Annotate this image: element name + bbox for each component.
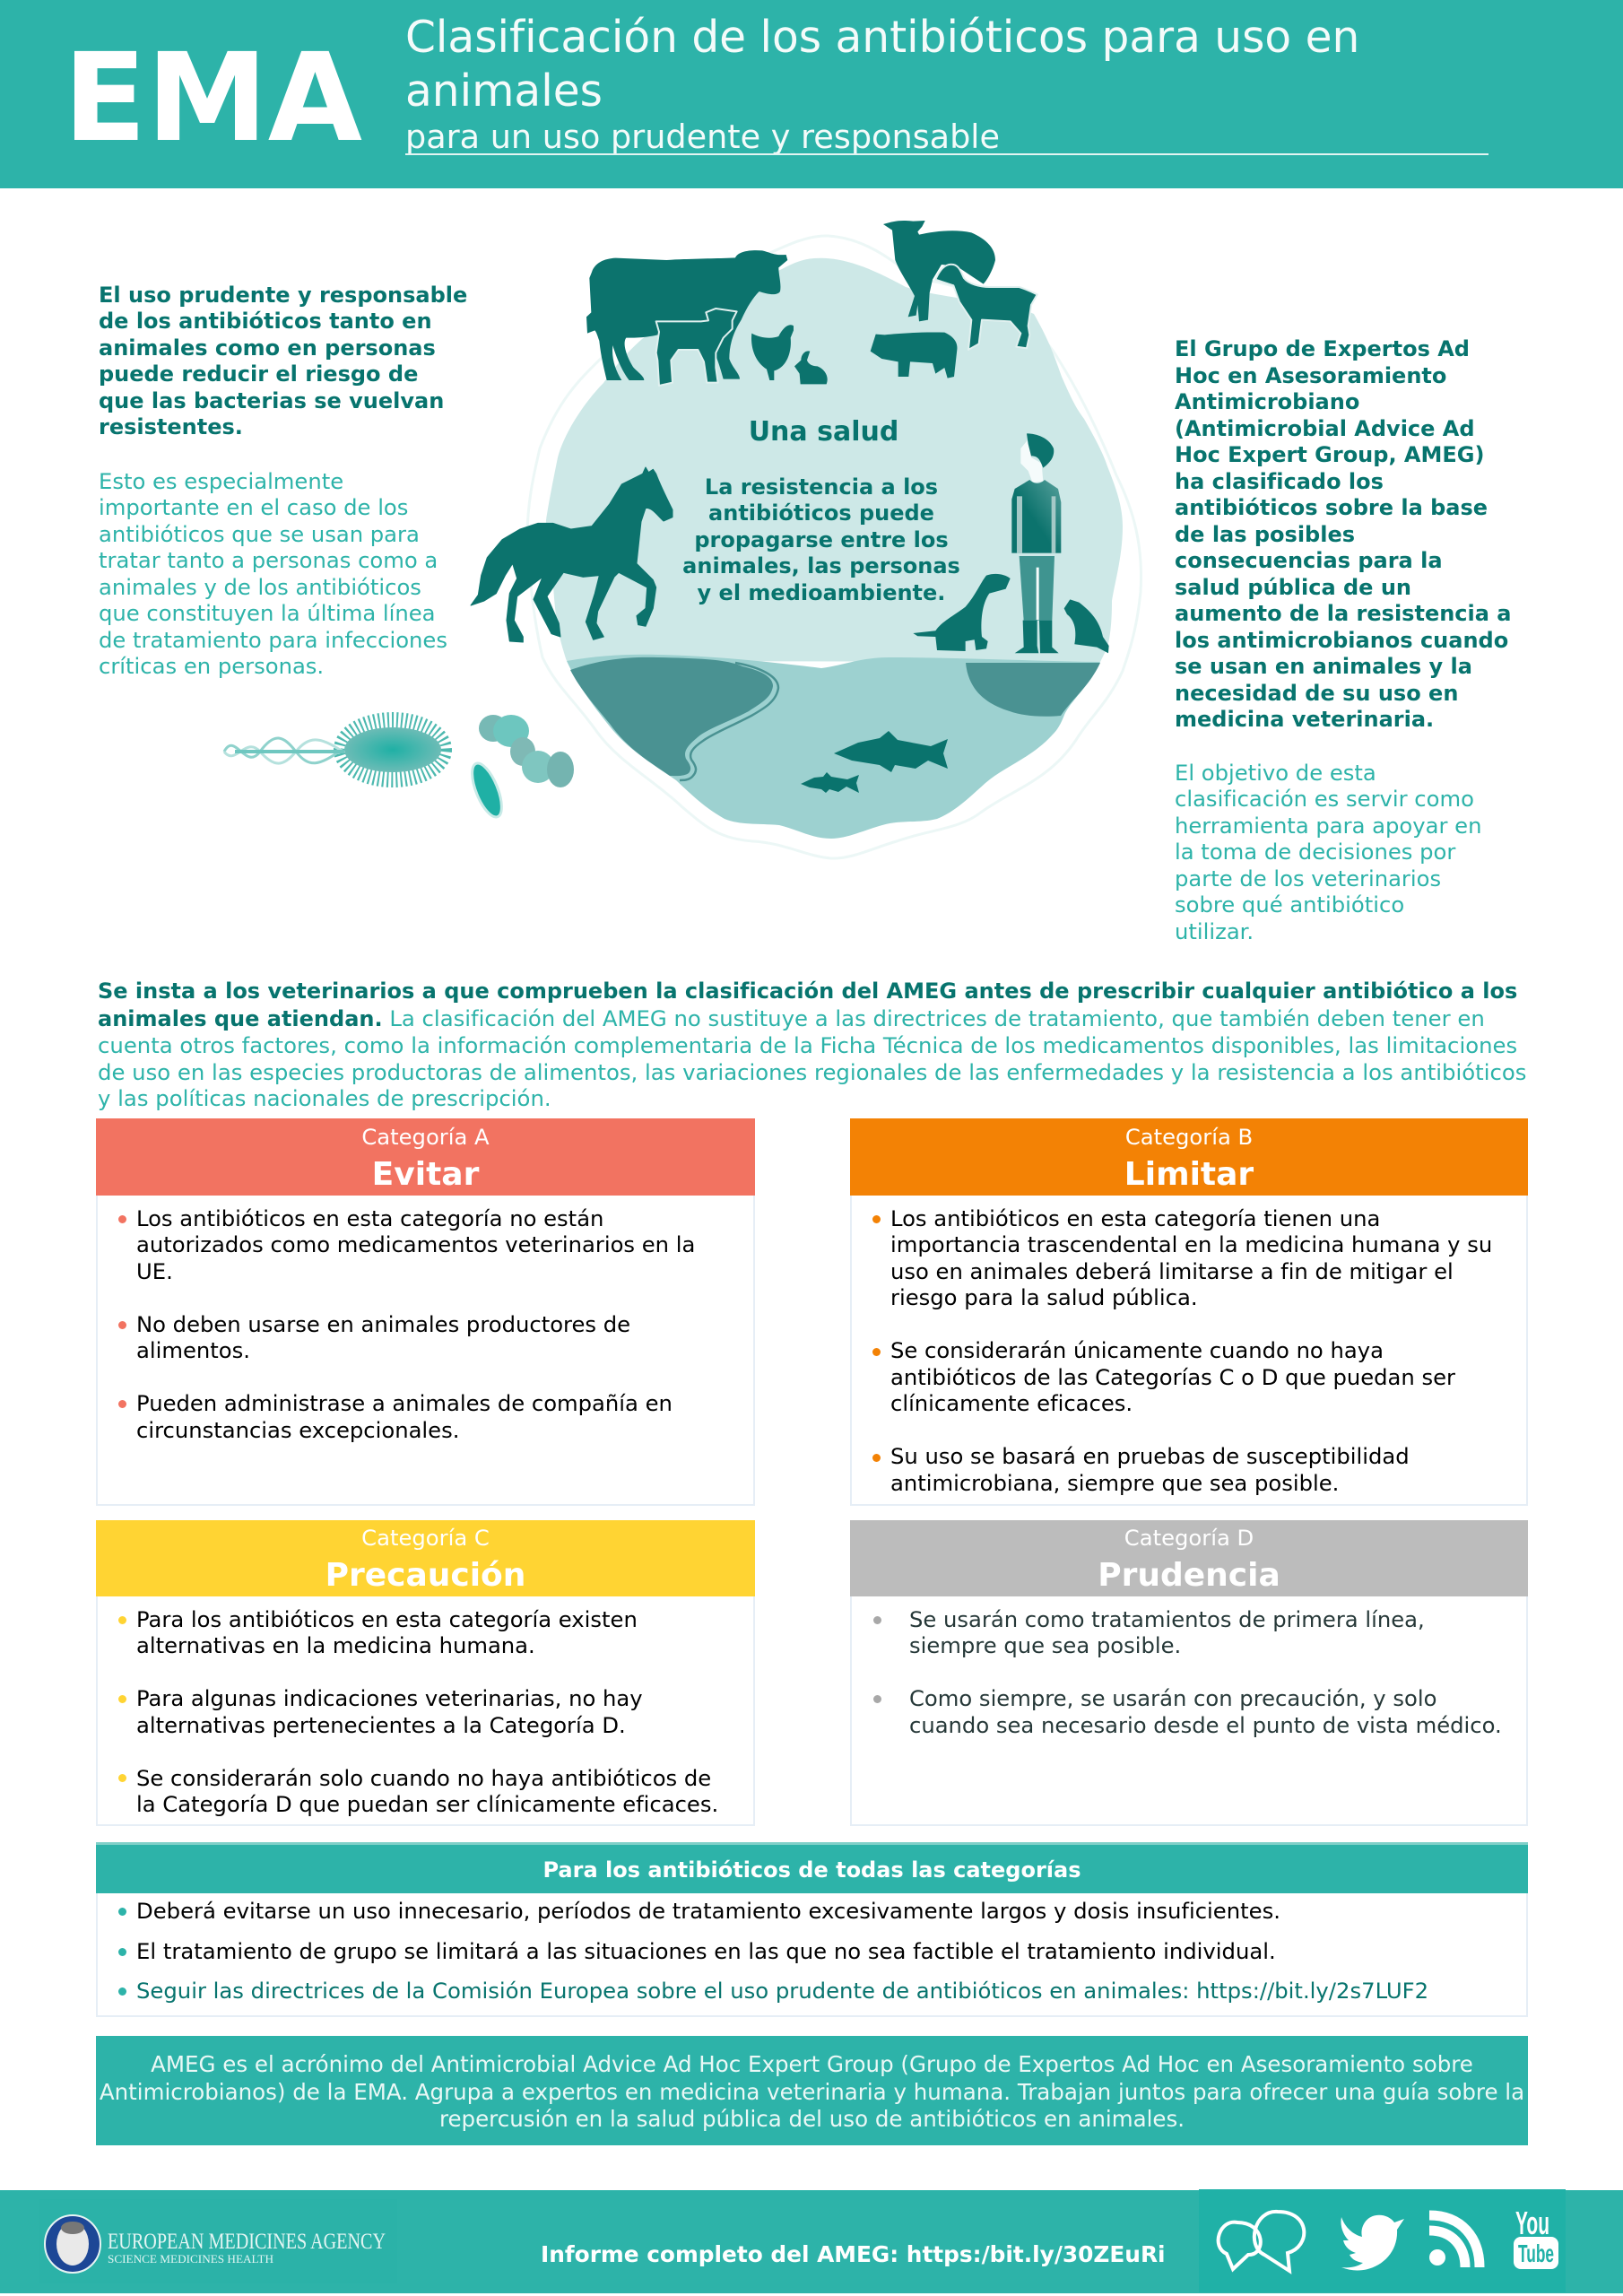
list D [873, 1605, 1502, 1738]
list A: Pueden administrase a animales de compañía en [136, 1390, 673, 1416]
right intro text: parte de los veterinarios [1175, 865, 1441, 891]
left intro bold text: que las bacterias se vuelvan [99, 387, 444, 413]
left intro bold text: animales como en personas [99, 335, 436, 361]
call to veterinarians paragraph: de uso en las especies productoras de alimentos, las variaciones regionales de las enfermedades y la resistencia a los antibióticos [98, 1058, 1526, 1085]
right intro bold text: El Grupo de Expertos Ad [1175, 336, 1470, 361]
right intro text: El objetivo de esta [1175, 759, 1376, 786]
list D: Se usarán como tratamientos de primera línea, [909, 1605, 1425, 1632]
list C: alternativas en la medicina humana. [136, 1632, 535, 1658]
right intro text: utilizar. [1175, 918, 1254, 944]
header D [850, 1520, 1528, 1596]
left intro text: de tratamiento para infecciones [99, 626, 447, 653]
icon: small fish [801, 772, 859, 793]
right intro bold text [1175, 336, 1512, 732]
header C [96, 1520, 755, 1596]
list A: autorizados como medicamentos veterinarios en la [136, 1231, 695, 1257]
header A [96, 1118, 755, 1196]
icon: person [1011, 433, 1061, 653]
left intro text: Esto es especialmente [99, 468, 343, 493]
left intro text: importante en el caso de los [99, 494, 408, 520]
list C [118, 1605, 718, 1817]
right intro text: clasificación es servir como [1175, 786, 1474, 812]
header B: Categoría B [1125, 1124, 1253, 1150]
all categories list: El tratamiento de grupo se limitará a las situaciones en las que no sea factible el tratamiento individual. [136, 1937, 1276, 1964]
right intro bold text: de las posibles [1175, 522, 1355, 547]
left intro text: tratar tanto a personas como a [99, 547, 438, 573]
list C: la Categoría D que puedan ser clínicamente eficaces. [136, 1791, 718, 1817]
agency tagline: SCIENCE MEDICINES HEALTH [108, 2252, 273, 2266]
One Health message: antibióticos puede [708, 500, 934, 526]
list A: No deben usarse en animales productores de [136, 1311, 630, 1336]
title: Clasificación de los antibióticos para uso en [405, 13, 1359, 63]
left intro bold text: de los antibióticos tanto en [99, 309, 432, 334]
panel: Categoría D [850, 1520, 1528, 1826]
icon: rod bacterium [466, 760, 508, 821]
all categories list [118, 1898, 1428, 2004]
call to veterinarians paragraph [98, 978, 1526, 1111]
icon: spiky bacterium with DNA [224, 721, 443, 778]
right intro bold text: necesidad de su uso en [1175, 680, 1458, 705]
One Health message: propagarse entre los [694, 527, 949, 552]
header B: Limitar [1124, 1155, 1254, 1193]
left intro bold text: puede reducir el riesgo de [99, 361, 418, 387]
icon: rabbit [794, 351, 828, 384]
icon: twitter bird [1341, 2215, 1404, 2271]
right intro bold text: consecuencias para la [1175, 548, 1443, 573]
list B: uso en animales deberá limitarse a fin de mitigar el [890, 1257, 1454, 1284]
right river bank [966, 663, 1100, 717]
footer band [0, 2190, 1623, 2293]
right intro text: la toma de decisiones por [1175, 839, 1455, 865]
icon: horse [471, 467, 673, 642]
AMEG note band [96, 2036, 1528, 2145]
all categories list: Deberá evitarse un uso innecesario, períodos de tratamiento excesivamente largos y dosis insuficientes. [136, 1898, 1280, 1924]
list B: antimicrobiana, siempre que sea posible. [890, 1469, 1339, 1496]
panel: Categoría A [96, 1118, 755, 1506]
left river bank [570, 657, 773, 776]
left intro text: animales y de los antibióticos [99, 574, 421, 599]
right intro text: sobre qué antibiótico [1175, 891, 1404, 918]
all categories list: Seguir las directrices de la Comisión Europea sobre el uso prudente de antibióticos en animales: https://bit.ly/2s7LUF2 [136, 1978, 1428, 2004]
right intro bold text: salud pública de un [1175, 574, 1411, 599]
AMEG note band: Antimicrobianos) de la EMA. Agrupa a expertos en medicina veterinaria y humana. Trabajan juntos para ofrecer una guía sobre la [100, 2079, 1524, 2104]
left intro text: antibióticos que se usan para [99, 520, 420, 547]
right intro bold text: ha clasificado los [1175, 468, 1384, 493]
list A: UE. [136, 1257, 173, 1284]
One Health message: y el medioambiente. [698, 579, 945, 604]
icon: pig [871, 333, 957, 378]
list B: Su uso se basará en pruebas de susceptibilidad [890, 1443, 1410, 1469]
list D: Como siempre, se usarán con precaución, y solo [909, 1685, 1436, 1711]
left intro bold text: El uso prudente y responsable [99, 282, 467, 307]
call to veterinarians paragraph: y las políticas nacionales de prescripción. [98, 1085, 551, 1111]
list A: alimentos. [136, 1337, 250, 1363]
all categories heading: Para los antibióticos de todas las categorías [542, 1857, 1081, 1883]
panel: all categories [96, 1842, 1528, 2017]
icon: cow [586, 250, 787, 380]
land blob [546, 258, 1123, 662]
call to veterinarians paragraph: Se insta a los veterinarios a que comprueben la clasificación del AMEG antes de prescribir cualquier antibiótico a los [98, 978, 1517, 1004]
header D: Prudencia [1098, 1557, 1280, 1593]
icon: sheep [883, 221, 995, 321]
One Health message: La resistencia a los [705, 474, 938, 499]
header A: Evitar [372, 1155, 479, 1193]
social icons [1216, 2205, 1558, 2274]
right intro text [1175, 759, 1481, 944]
right intro bold text: (Antimicrobial Advice Ad [1175, 416, 1475, 441]
right intro bold text: aumento de la resistencia a [1175, 601, 1512, 626]
list A [118, 1205, 695, 1442]
left intro text: que constituyen la última línea [99, 600, 436, 626]
icon: chain bacterium [479, 715, 574, 787]
EMA logo [44, 2214, 386, 2274]
left intro text: críticas en personas. [99, 653, 324, 679]
list B: Se considerarán únicamente cuando no haya [890, 1337, 1384, 1363]
icon: dog [913, 574, 1011, 651]
outer contour [527, 236, 1141, 858]
header C: Precaución [325, 1557, 525, 1593]
icon: youtube [1514, 2205, 1558, 2269]
call to veterinarians paragraph: cuenta otros factores, como la información complementaria de la Ficha Técnica de los medicamentos disponibles, las limitaciones [98, 1032, 1517, 1058]
icon: rss [1429, 2215, 1480, 2267]
panel: Categoría B [850, 1118, 1528, 1506]
all categories heading [96, 1842, 1528, 1893]
right intro bold text: Antimicrobiano [1175, 389, 1359, 414]
right intro bold text: medicina veterinaria. [1175, 707, 1434, 732]
call to veterinarians paragraph: animales que atiendan. La clasificación del AMEG no sustituye a las directrices de tratamiento, que también deben tener en [98, 1004, 1485, 1031]
right intro bold text: Hoc Expert Group, AMEG) [1175, 442, 1484, 467]
right intro bold text: se usan en animales y la [1175, 654, 1472, 679]
right intro text: herramienta para apoyar en [1175, 813, 1481, 838]
subtitle rule [405, 153, 1488, 155]
One Health illustration [222, 221, 1142, 859]
left intro text [99, 468, 447, 679]
title: animales [405, 66, 603, 117]
river shore stripe [680, 663, 778, 780]
list B: clínicamente eficaces. [890, 1390, 1133, 1416]
left intro bold text: resistentes. [99, 414, 243, 439]
One Health message [682, 474, 960, 604]
social background [1199, 2189, 1566, 2292]
logo text: EMA: EMA [63, 28, 362, 170]
icon: calf [656, 309, 737, 386]
icon: speech bubbles [1219, 2212, 1304, 2271]
AMEG note band: repercusión en la salud pública del uso de antibióticos en animales. [439, 2106, 1185, 2132]
right intro bold text: antibióticos sobre la base [1175, 495, 1488, 520]
list D: siempre que sea posible. [909, 1632, 1181, 1658]
list B [872, 1205, 1492, 1496]
heading: Una salud: Una salud [749, 416, 898, 448]
AMEG note band: AMEG es el acrónimo del Antimicrobial Advice Ad Hoc Expert Group (Grupo de Expertos Ad Hoc en Asesoramiento sobre [151, 2051, 1473, 2077]
water [567, 655, 1100, 839]
list B: antibióticos de las Categorías C o D que puedan ser [890, 1363, 1455, 1390]
right intro bold text: los antimicrobianos cuando [1175, 628, 1508, 653]
header C: Categoría C [361, 1525, 490, 1551]
list C: Se considerarán solo cuando no haya antibióticos de [136, 1765, 711, 1790]
list B: riesgo para la salud pública. [890, 1284, 1198, 1310]
header D: Categoría D [1124, 1525, 1254, 1551]
title [405, 13, 1359, 117]
list D: cuando sea necesario desde el punto de vista médico. [909, 1711, 1502, 1738]
list A: circunstancias excepcionales. [136, 1417, 459, 1442]
icon: goat [935, 265, 1037, 350]
One Health message: animales, las personas [682, 553, 960, 578]
header band [0, 0, 1623, 188]
icon: cat [1064, 599, 1109, 653]
list C: Para algunas indicaciones veterinarias, no hay [136, 1685, 643, 1711]
list A: Los antibióticos en esta categoría no están [136, 1205, 603, 1231]
list B: Los antibióticos en esta categoría tienen una [890, 1205, 1380, 1231]
list C: alternativas pertenecientes a la Categoría D. [136, 1711, 626, 1738]
right intro bold text: Hoc en Asesoramiento [1175, 362, 1446, 387]
header B [850, 1118, 1528, 1196]
icon: large fish [834, 731, 948, 772]
panel: Categoría C [96, 1520, 755, 1826]
header A: Categoría A [361, 1124, 490, 1150]
list B: importancia trascendental en la medicina humana y su [890, 1231, 1492, 1257]
left intro bold text [99, 282, 467, 439]
subtitle: para un uso prudente y responsable [405, 117, 1000, 156]
full report link: Informe completo del AMEG: https:/bit.ly/30ZEuRi [541, 2241, 1166, 2267]
list C: Para los antibióticos en esta categoría existen [136, 1605, 638, 1632]
icon: chicken [751, 325, 794, 380]
